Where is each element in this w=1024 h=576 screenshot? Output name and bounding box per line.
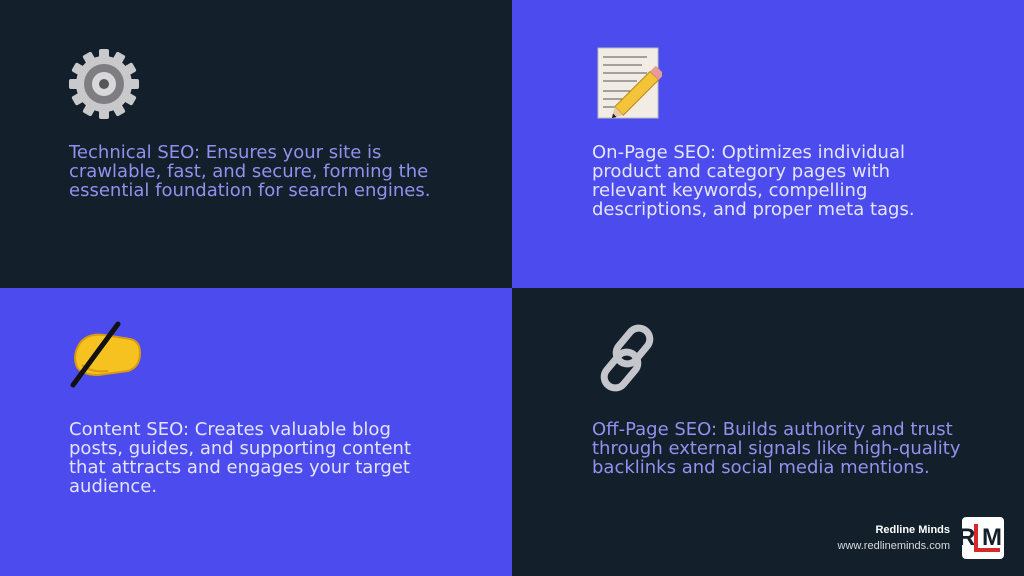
brand text: www.redlineminds.com xyxy=(838,540,950,552)
text: content seo: posts, guides, and supporting content xyxy=(69,438,411,459)
icon: chain link xyxy=(600,324,654,392)
icon: writing hand xyxy=(70,322,141,388)
text: on-page seo xyxy=(592,142,915,220)
text: content seo xyxy=(69,419,411,497)
text: technical seo: crawlable, fast, and secure, forming the xyxy=(69,161,428,182)
text: off-page seo xyxy=(592,419,960,478)
logo xyxy=(962,517,1004,559)
text: content seo: audience. xyxy=(69,476,157,497)
panel: content seo xyxy=(0,288,512,576)
brand text: Redline Minds xyxy=(875,524,950,536)
text: off-page seo: Off-Page SEO: Builds authority and trust xyxy=(592,419,953,440)
icon: notepad with pencil xyxy=(598,48,662,118)
text: content seo: that attracts and engages your target xyxy=(69,457,410,478)
icon: gear xyxy=(69,49,139,119)
brand block xyxy=(838,517,1004,559)
text: on-page seo: descriptions, and proper meta tags. xyxy=(592,199,915,220)
panel: technical seo xyxy=(0,0,512,288)
panel: on-page seo xyxy=(512,0,1024,288)
panel: off-page seo xyxy=(512,288,1024,576)
brand text xyxy=(838,524,950,552)
text: on-page seo: relevant keywords, compelling xyxy=(592,180,867,201)
text: technical seo: essential foundation for search engines. xyxy=(69,180,430,201)
text: technical seo xyxy=(68,142,430,201)
text: off-page seo: backlinks and social media mentions. xyxy=(592,457,930,478)
logo: M xyxy=(982,524,1002,551)
text: off-page seo: through external signals like high-quality xyxy=(592,438,960,459)
text: on-page seo: product and category pages with xyxy=(592,161,890,182)
text: on-page seo: On-Page SEO: Optimizes individual xyxy=(592,142,905,163)
text: technical seo: Technical SEO: Ensures your site is xyxy=(69,142,381,163)
text: content seo: Content SEO: Creates valuable blog xyxy=(69,419,391,440)
